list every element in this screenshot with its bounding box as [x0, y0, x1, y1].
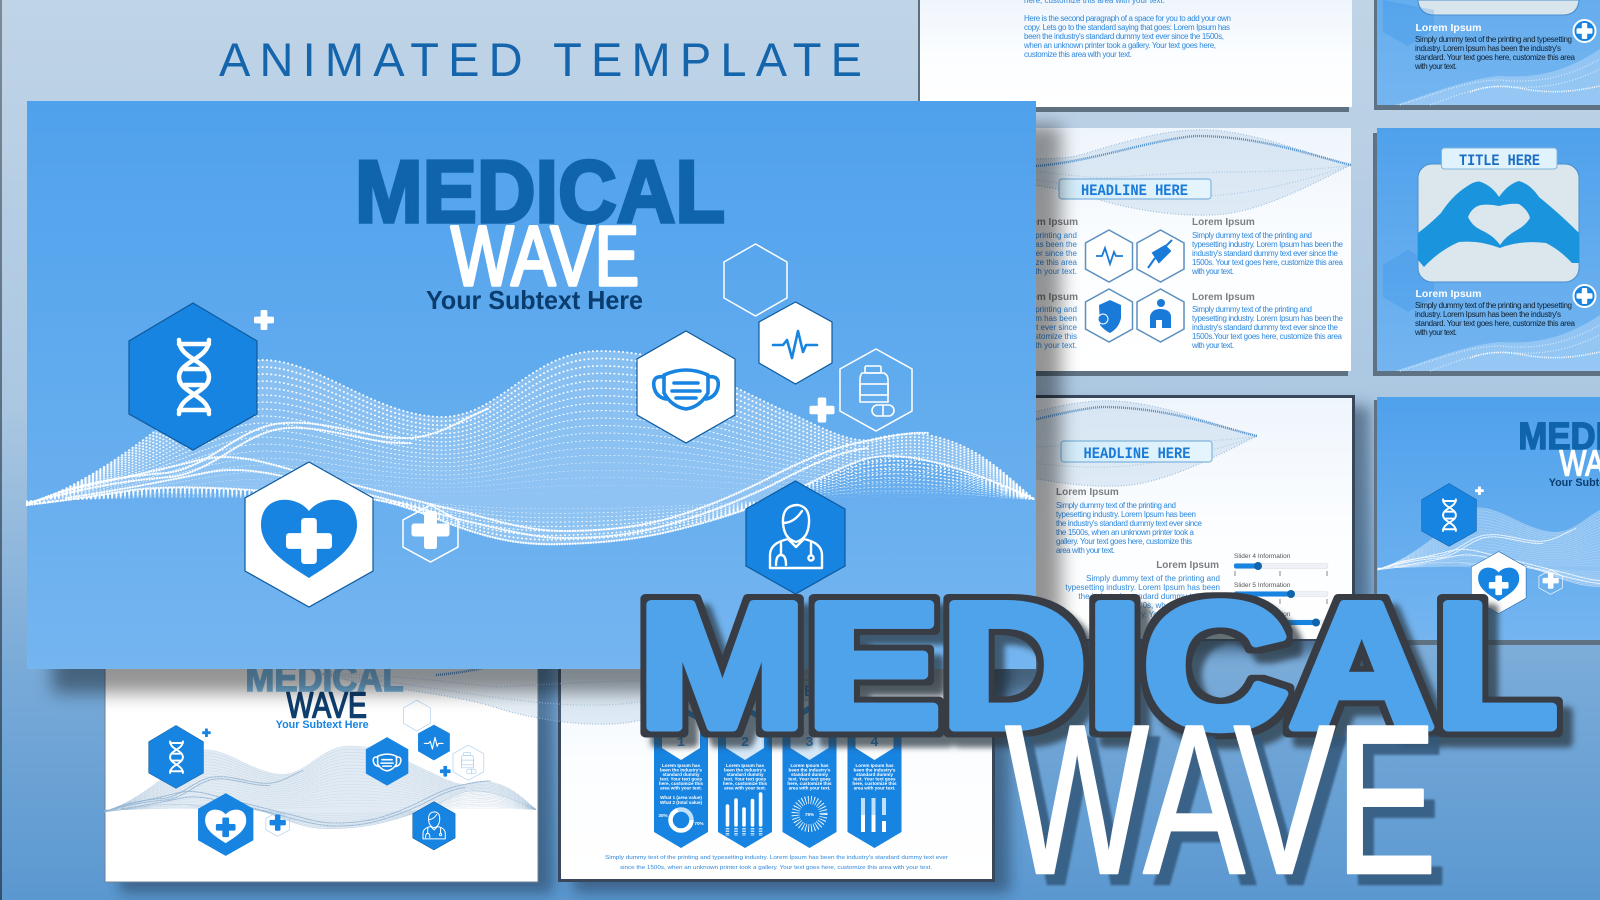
column 3: standard dummy	[791, 772, 828, 777]
icon: shield hexagon	[1086, 289, 1132, 342]
left column text: with your text.	[1027, 267, 1077, 276]
chart: dotted particle wave	[27, 351, 1034, 544]
column 4	[848, 705, 902, 848]
column 3: 3	[805, 735, 814, 751]
panel: headline slide with four icon hexagons	[908, 128, 1351, 376]
slider 4	[1234, 553, 1328, 576]
column headings	[1015, 217, 1255, 303]
heading: medical: MEDICAL	[355, 142, 725, 241]
column 3: text. Your text goes	[788, 776, 831, 782]
right column text: typesetting industry. Lorem Ipsum has been the	[1192, 240, 1344, 249]
top right thumbnail paragraph: with your text.	[1414, 62, 1457, 71]
panel: bottom left white slide thumbnail	[105, 639, 538, 882]
title slide paragraph: industry. Lorem Ipsum has been the industry's	[1415, 310, 1561, 319]
column 3: here, customize this	[787, 781, 832, 786]
panel: top right thumbnail slide: Lorem Ipsum	[1416, 22, 1481, 34]
slider 5	[1234, 582, 1328, 604]
left column text: 1500s. Your text goes here, customize this	[927, 332, 1077, 341]
column 1: here, customize this	[659, 781, 704, 786]
title pill: TITLE HERE	[1459, 152, 1540, 170]
column headings: Lorem Ipsum	[1015, 217, 1078, 228]
column 4: here, customize this	[852, 781, 897, 786]
column 1: standard dummy	[662, 772, 700, 777]
column 1: What 2 (total value)	[660, 800, 703, 805]
caption: Simply dummy text of the printing and typesetting industry. Lorem Ipsum has been the industry's standard dummy text ever	[605, 855, 948, 861]
left column text: Simply dummy text of the printing and	[943, 305, 1077, 314]
top right thumbnail paragraph: industry. Lorem Ipsum has been the industry's	[1415, 44, 1561, 53]
left column text: the industry's standard dummy text ever since	[914, 323, 1078, 332]
left edge line	[0, 0, 2, 900]
panel: title here slide: Lorem Ipsum	[1416, 288, 1481, 300]
title slide paragraph: with your text.	[1414, 328, 1457, 337]
left column text: industry's standard dummy text ever since the	[914, 249, 1078, 258]
column 1: area with your text.	[660, 786, 702, 790]
right column text: industry's standard dummy text ever since the	[1192, 323, 1339, 332]
column 2: here, customize this	[723, 781, 768, 786]
slider 4: Slider 4 Information	[1234, 553, 1291, 560]
left aligned paragraph: the industry's standard dummy text ever since	[1056, 519, 1203, 528]
right aligned paragraph: Simply dummy text of the printing and	[1086, 574, 1220, 583]
column headings: Lorem Ipsum	[1192, 292, 1255, 303]
left column text: Simply dummy text of the printing and	[943, 231, 1077, 240]
column 1: text. Your text goes	[660, 776, 703, 782]
slider 6	[1234, 611, 1328, 626]
column 1: What 1 (area value)	[660, 795, 702, 800]
subtitle: Your Subtext Here	[426, 285, 643, 315]
column 1: 70%	[694, 821, 704, 826]
column 1	[654, 705, 708, 848]
column 3: 75%	[805, 812, 814, 817]
headline pill: HEADLINE HERE	[1081, 182, 1188, 200]
left aligned paragraph: area with your text.	[1056, 546, 1115, 555]
panel: headline slide with sliders	[826, 395, 1355, 641]
right aligned paragraph: the industry's standard dummy text ever	[1078, 592, 1220, 601]
right column text: industry's standard dummy text ever since the	[1192, 249, 1339, 258]
icon: syringe hexagon	[1137, 230, 1184, 282]
column 3: area with your text.	[789, 786, 830, 790]
thumbnail paragraph: when an unknown printer took a gallery. Your text goes here,	[1023, 41, 1216, 50]
right aligned paragraph: typesetting industry. Lorem Ipsum has been	[1065, 583, 1220, 592]
headline pill: HEADLINE HERE	[722, 683, 829, 701]
column 1: 1	[677, 735, 685, 751]
icon: injured person hexagon	[1137, 289, 1184, 342]
panel: bottom left white slide thumbnail: WAVE	[286, 685, 367, 726]
column 3: been the industry's	[789, 768, 831, 772]
left column text: 1500s. Your text goes here, customize this area	[908, 258, 1078, 267]
thumbnail paragraph: copy. Lets go to the standard saying that goes: Lorem Ipsum has	[1024, 23, 1230, 32]
right column text: with your text.	[1191, 341, 1234, 350]
left aligned paragraph: the 1500s, when an unknown printer took a	[1056, 528, 1195, 537]
left aligned paragraph: typesetting industry. Lorem Ipsum has been	[1056, 510, 1196, 519]
panel: bottom center slide with four hexagon columns	[320, 637, 995, 882]
panel: title here slide	[1373, 128, 1600, 376]
right column text: Simply dummy text of the printing and	[1192, 231, 1312, 240]
column 3	[782, 705, 836, 848]
column 2: standard dummy	[726, 772, 764, 777]
column 2	[718, 705, 772, 848]
headline pill: HEADLINE HERE	[1084, 445, 1190, 463]
column 4: text. Your text goes	[853, 776, 896, 782]
column 2: Lorem Ipsum has	[726, 763, 764, 768]
column 4: Lorem Ipsum has	[855, 763, 894, 768]
caption: since the 1500s, when an unknown printer took a gallery. Your text goes here, customize this area with your text.	[620, 865, 932, 871]
left column text: typesetting industry. Lorem Ipsum has been the	[909, 240, 1078, 249]
top right thumbnail paragraph: standard. Your text goes here, customize this area	[1415, 53, 1576, 62]
left column text: area with your text.	[1009, 341, 1077, 350]
panel: top right thumbnail slide	[1374, 0, 1600, 110]
photo of gloved hands	[1418, 164, 1579, 282]
icons: medical hexagons	[129, 244, 912, 607]
title: animated template: ANIMATED TEMPLATE	[219, 33, 862, 86]
thumbnail paragraph: customize this area with your text.	[1024, 50, 1132, 59]
column 1: Lorem Ipsum has	[662, 763, 700, 768]
column 4: area with your text.	[854, 786, 895, 790]
column 2: 2	[741, 735, 749, 751]
icon: pulse hexagon	[1086, 230, 1132, 282]
panel: headline slide with sliders: Lorem Ipsum	[1056, 487, 1119, 498]
column 4: standard dummy	[856, 772, 893, 777]
heading: wave: WAVE	[451, 209, 639, 303]
panel: main slide	[27, 101, 1036, 669]
panel: top thumbnail slide with text	[918, 0, 1352, 112]
left aligned paragraph: Simply dummy text of the printing and	[1056, 501, 1176, 510]
right column text: typesetting industry. Lorem Ipsum has been the	[1192, 314, 1344, 323]
title slide paragraph: standard. Your text goes here, customize this area	[1415, 319, 1576, 328]
right column text: 1500s. Your text goes here, customize this area	[1192, 258, 1344, 267]
left column text: typesetting industry. Lorem Ipsum has been	[922, 314, 1077, 323]
panel: headline slide with sliders: Lorem Ipsum	[1156, 560, 1219, 571]
column 2: area with your text.	[724, 786, 766, 790]
right column text: 1500s.Your text goes here, customize this area	[1192, 332, 1343, 341]
thumbnail paragraph: been the industry's standard dummy text ever since the 1500s,	[1024, 32, 1224, 41]
right column text: with your text.	[1191, 267, 1234, 276]
thumbnail paragraph: Here is the second paragraph of a space for you to add your own	[1024, 14, 1231, 23]
right aligned paragraph: gallery. Your text goes here,	[1121, 610, 1220, 619]
big title: medical: MEDICAL	[638, 566, 1558, 765]
title slide paragraph: Simply dummy text of the printing and typesetting	[1415, 301, 1572, 310]
panel: bottom left white slide thumbnail: Your Subtext Here	[276, 719, 369, 731]
column 4: 4	[870, 735, 879, 751]
caption	[605, 855, 948, 871]
column headings: Lorem Ipsum	[1192, 217, 1255, 228]
column 1: been the industry's	[660, 768, 702, 772]
left aligned paragraph: gallery. Your text goes here, customize this	[1056, 537, 1192, 546]
top right thumbnail paragraph: Simply dummy text of the printing and typesetting	[1415, 35, 1572, 44]
panel: right title slide thumbnail	[1374, 397, 1600, 645]
slider 6: Slider 6 Information	[1234, 611, 1291, 618]
right column text: Simply dummy text of the printing and	[1192, 305, 1312, 314]
thumbnail title: MEDICAL	[245, 657, 404, 699]
column 1: 30%	[658, 813, 668, 818]
title pill	[1442, 148, 1557, 170]
column 3: Lorem Ipsum has	[790, 763, 829, 768]
column headings: Lorem Ipsum	[1015, 292, 1078, 303]
headline pill	[1061, 441, 1212, 463]
column 2: text. Your text goes	[724, 776, 767, 782]
column 2: been the industry's	[724, 768, 766, 772]
slider 5: Slider 5 Information	[1234, 582, 1291, 589]
right aligned paragraph: since the 1500s, when an unknown	[1095, 601, 1220, 610]
column 4: been the industry's	[854, 768, 896, 772]
